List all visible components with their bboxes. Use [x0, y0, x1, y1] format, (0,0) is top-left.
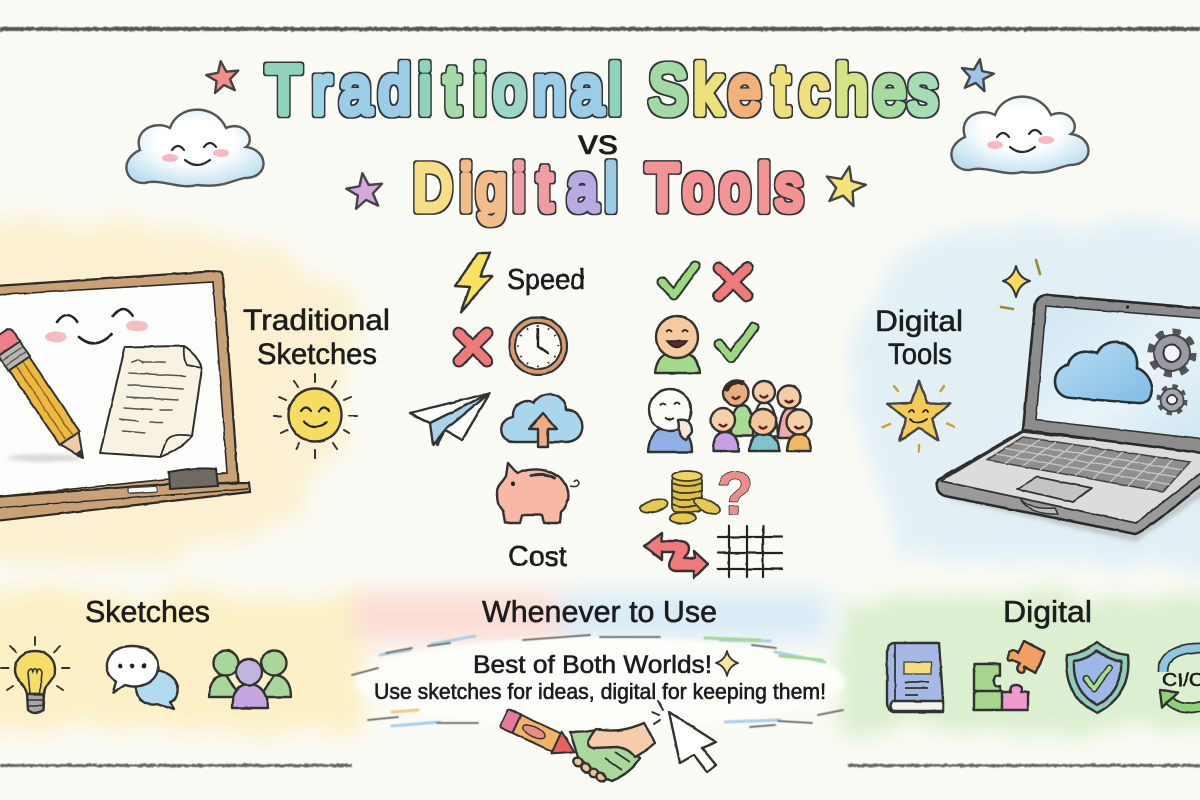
- label: Digital Tools: Tools: [888, 338, 952, 371]
- icon: group of happy people: [711, 380, 812, 451]
- bottom icons: sketches: [1, 637, 291, 713]
- icon: CI/CD cycle: CI/C: [1162, 670, 1200, 690]
- title: [266, 53, 938, 224]
- icon: crayon: [499, 707, 580, 762]
- icon: sparkle: [716, 651, 738, 676]
- star: purple: [344, 171, 385, 210]
- label: Digital Tools: [875, 305, 963, 371]
- bottom icons: handshake tools: [499, 701, 716, 783]
- callout white oval: [355, 637, 845, 727]
- icon: paper plane: [410, 393, 490, 445]
- eraser: [169, 468, 218, 489]
- icon: cloud upload: [501, 394, 582, 447]
- icon: smiling sun: [274, 374, 357, 458]
- title word: vs: vs: [578, 123, 618, 162]
- star: blue: [959, 56, 996, 92]
- icon: mouse cursor: [652, 701, 716, 772]
- colour wash: bottom sketches band: [0, 596, 365, 730]
- icon: handshake: [570, 723, 655, 783]
- icon: thinking person: [648, 389, 692, 452]
- label: Traditional Sketches: Traditional: [243, 304, 390, 337]
- small gear: [1160, 388, 1184, 412]
- laptop shadow: [950, 490, 1200, 538]
- paper note: [100, 346, 202, 457]
- colour wash: traditional side: [0, 218, 355, 566]
- icon: puzzle pieces: [974, 641, 1045, 710]
- laptop screen: [1036, 306, 1200, 440]
- label: Sketches: Sketches: [85, 594, 210, 629]
- icon: speech bubbles: [107, 646, 178, 709]
- cloud with face: left: [126, 110, 264, 186]
- screen cloud: [1055, 342, 1152, 403]
- icon: happy person: [655, 316, 700, 373]
- laptop base: [937, 431, 1200, 534]
- icon: light bulb: [1, 637, 69, 713]
- label: Traditional Sketches: [243, 304, 390, 371]
- keyboard: [987, 437, 1190, 492]
- icon: grid: [718, 526, 782, 577]
- whiteboard frame: [0, 271, 238, 500]
- title word: Digital: Digit al: [413, 151, 617, 224]
- icon: book: [887, 643, 943, 712]
- laptop lid: [1023, 295, 1200, 454]
- colour wash: bottom centre rainbow: [355, 592, 830, 642]
- callout pencil dashes: [352, 635, 843, 727]
- pencil: [0, 327, 94, 465]
- label: Cost: Cost: [508, 541, 567, 573]
- icon: question mark: ?: [717, 460, 753, 527]
- label: Whenever to Use: Whenever to Use: [482, 594, 717, 629]
- star: yellow: [822, 162, 869, 208]
- bottom sketch line right: [848, 764, 1200, 767]
- illustration: laptop: [937, 295, 1200, 538]
- whiteboard tray: [0, 483, 250, 521]
- icon: CI/CD cycle: [1160, 648, 1200, 708]
- label: Speed: Speed: [507, 264, 585, 296]
- icon: three people: [209, 650, 291, 708]
- cloud with face: right: [951, 97, 1088, 173]
- large gear: [1152, 333, 1192, 373]
- illustration: whiteboard with pencil and paper: [0, 271, 250, 521]
- icon: smiling star: [883, 381, 954, 452]
- title word: Traditional: Traditional: [266, 53, 621, 128]
- whiteboard surface: [0, 282, 227, 497]
- icon: shield with check: [1066, 642, 1128, 713]
- label: Digital Tools: Digital: [875, 305, 963, 338]
- icon: red cross: [459, 333, 487, 361]
- title word: Sketches: Sketches: [649, 53, 938, 128]
- colour wash: bottom digital band: [840, 596, 1200, 730]
- colour wash: digital side: [850, 220, 1200, 568]
- icon: clock: [509, 317, 567, 375]
- title word: Tools: Tools: [646, 151, 802, 224]
- top sketch border line: [0, 27, 1200, 31]
- star: coral: [205, 59, 241, 94]
- label: Digital: Digital: [1003, 594, 1092, 629]
- chalk: [128, 486, 157, 494]
- callout: best of both worlds: [352, 635, 845, 727]
- icon: squiggly two-way arrow: [644, 533, 708, 578]
- callout text: Use sketches for ideas, digital for keeping them!: [374, 679, 826, 704]
- pencil shadow: [7, 454, 83, 462]
- hinge notch: [1020, 499, 1058, 514]
- icon: lightning bolt: [455, 253, 492, 312]
- label: Traditional Sketches: Sketches: [257, 338, 377, 371]
- centre comparison icons: [410, 253, 812, 578]
- icon: piggy bank: [497, 463, 579, 523]
- touchpad: [1017, 477, 1092, 502]
- bottom icons: digital: [887, 641, 1200, 713]
- callout heading: Best of Both Worlds!: [473, 651, 712, 679]
- whiteboard face: [45, 309, 148, 343]
- bottom sketch line left: [0, 764, 352, 767]
- icon: green check: [662, 266, 695, 295]
- icon: sparkle above laptop: [1001, 260, 1040, 309]
- icon: coin pile: [639, 471, 722, 524]
- icon: green check: [719, 327, 754, 358]
- icon: red cross: [719, 268, 747, 296]
